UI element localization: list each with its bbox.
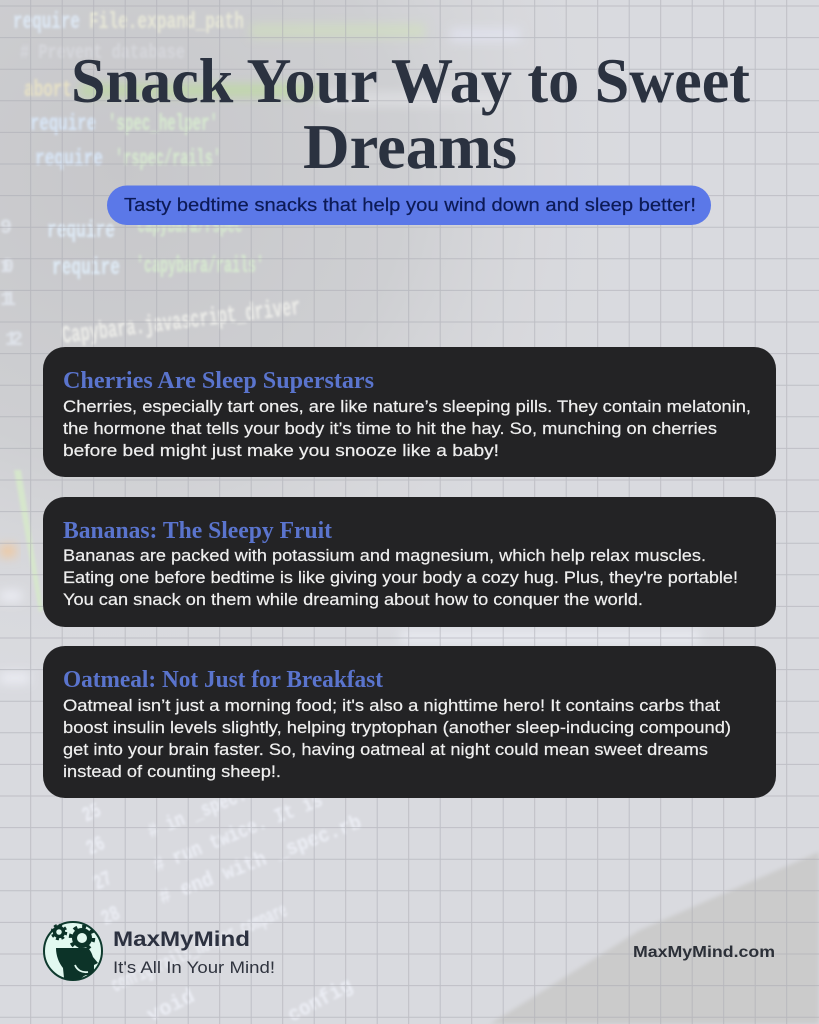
text: cherries: Cherries, especially tart ones, are like nature’s sleeping pills. They contain melatonin, bbox=[63, 397, 751, 416]
title: Snack Your Way to Sweet bbox=[71, 45, 751, 116]
background: blurred code photo: # run twice. It is bbox=[151, 790, 327, 878]
background: blurred code photo: require bbox=[30, 111, 96, 137]
background: blurred code photo: 27 bbox=[90, 868, 116, 896]
icon: logo head with gears bbox=[44, 922, 102, 980]
background: blurred code photo: # Prevent database bbox=[20, 42, 185, 65]
panel: oatmeal bbox=[43, 646, 776, 798]
subtitle pill: Tasty bedtime snacks that help you wind down and sleep better! bbox=[124, 195, 696, 215]
background: blurred code photo: 25 bbox=[79, 800, 105, 828]
panel: cherries bbox=[43, 347, 776, 477]
text: oatmeal bbox=[63, 696, 731, 781]
background: blurred code photo: 'capybara/rspec' bbox=[130, 216, 250, 239]
text: oatmeal: Oatmeal isn’t just a morning food; it's also a nighttime hero! It contains carbs that bbox=[63, 696, 720, 715]
text: cherries: the hormone that tells your body it’s time to hit the hay. So, munching on cherries bbox=[63, 419, 717, 438]
background: blurred code photo: 11 bbox=[0, 289, 16, 312]
background: blurred code photo: 'spec_helper' bbox=[108, 111, 218, 137]
background: blurred code photo: Capybara.javascript_driver bbox=[60, 293, 302, 351]
icon: head silhouette bbox=[56, 948, 98, 980]
icon: small gear bbox=[52, 925, 66, 939]
background: blurred code photo: 'capybara/rails' bbox=[136, 253, 264, 279]
background: blurred code photo: 'rspec/rails' bbox=[115, 146, 221, 172]
background: blurred code photo: # in _spec.rb. It is bbox=[145, 752, 330, 844]
background: blurred code photo: config.rails_helper compare bbox=[108, 900, 291, 998]
subtitle pill bbox=[107, 186, 711, 225]
tagline: It's All In Your Mind! bbox=[113, 959, 275, 977]
brand name: MaxMyMind bbox=[113, 928, 250, 951]
text: cherries: before bed might just make you snooze like a baby! bbox=[63, 441, 499, 460]
text: oatmeal: get into your brain faster. So, having oatmeal at night could mean sweet dreams bbox=[63, 740, 708, 759]
title bbox=[71, 45, 751, 182]
text: oatmeal: boost insulin levels slightly, helping tryptophan (another sleep-inducing compound) bbox=[63, 718, 731, 737]
heading: cherries: Cherries Are Sleep Superstars bbox=[63, 368, 374, 394]
text: bananas bbox=[63, 546, 738, 609]
heading: oatmeal: Oatmeal: Not Just for Breakfast bbox=[63, 667, 383, 693]
background: blurred code photo: 9 bbox=[0, 217, 12, 240]
background: blurred code photo: require bbox=[13, 9, 80, 35]
background: blurred code photo: abort bbox=[24, 77, 72, 103]
icon: smile line bbox=[75, 965, 88, 972]
website: MaxMyMind.com bbox=[633, 944, 775, 961]
background: blurred code photo: 10 bbox=[0, 256, 14, 279]
title: Dreams bbox=[303, 111, 517, 182]
text: bananas: Eating one before bedtime is like giving your body a cozy hug. Plus, they're portable! bbox=[63, 568, 738, 587]
background: blurred code photo: require bbox=[52, 255, 120, 282]
text: bananas: Bananas are packed with potassium and magnesium, which help relax muscles. bbox=[63, 546, 706, 565]
background: blurred code photo: # end with _spec.rb bbox=[156, 812, 365, 911]
text: bananas: You can snack on them while dreaming about how to conquer the world. bbox=[63, 590, 643, 609]
background: blurred code photo: require bbox=[47, 218, 115, 245]
background: blurred code photo: 28 bbox=[98, 903, 124, 931]
panel: bananas bbox=[43, 497, 776, 627]
icon: large gear bbox=[70, 926, 94, 950]
background: blurred code photo: File.expand_path bbox=[89, 9, 244, 35]
text: cherries bbox=[63, 397, 751, 460]
background: blurred code photo: 12 bbox=[5, 329, 23, 352]
text: oatmeal: instead of counting sheep!. bbox=[63, 762, 281, 781]
background: blurred code photo: 26 bbox=[83, 833, 109, 861]
heading: bananas: Bananas: The Sleepy Fruit bbox=[63, 518, 332, 544]
background: blurred code photo: require bbox=[35, 146, 103, 172]
